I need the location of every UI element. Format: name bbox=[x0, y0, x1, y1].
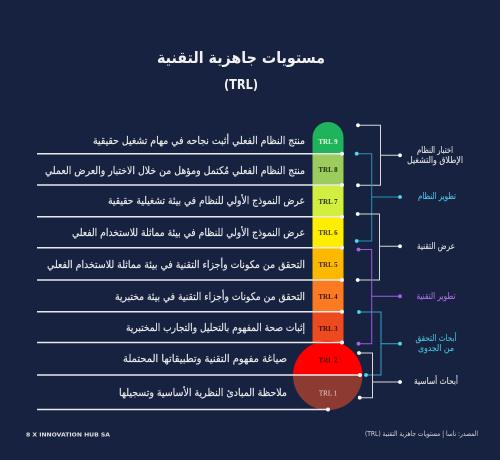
thermometer bbox=[293, 122, 362, 410]
bracket: basic research bbox=[357, 351, 402, 400]
bracket: technology development bbox=[357, 248, 402, 346]
segment: TRL 5 bbox=[312, 248, 344, 280]
level descriptions: منتج النظام الفعلي أثبت نجاحه في مهام تشغيل حقيقية bbox=[93, 133, 305, 147]
segment: TRL 7 bbox=[312, 185, 344, 217]
bulb: TRL 1 bbox=[293, 376, 362, 410]
TRL labels: TRL 6 bbox=[318, 229, 338, 237]
category label: feasibility research bbox=[416, 332, 456, 354]
segment: TRL 9 bbox=[312, 122, 344, 154]
title: مستويات جاهزية التقنية bbox=[157, 48, 325, 67]
category label: basic research: أبحاث أساسية bbox=[414, 375, 458, 387]
TRL labels: TRL 9 bbox=[318, 138, 338, 146]
source note: المصدر: ناسا | مستويات جاهزية التقنية (TRL) bbox=[365, 430, 478, 438]
segment: TRL 3 bbox=[312, 312, 344, 343]
level descriptions: ملاحظة المبادئ النظرية الأساسية وتسجيلها bbox=[119, 386, 287, 399]
segment: TRL 8 bbox=[312, 154, 344, 185]
title: (TRL) bbox=[224, 78, 258, 93]
brand logo text: 8 X INNOVATION HUB SA bbox=[26, 432, 110, 438]
TRL labels: TRL 2 bbox=[318, 356, 338, 364]
TRL labels bbox=[318, 138, 338, 398]
category label: technology development: تطوير التقنية bbox=[416, 292, 456, 302]
level descriptions: صياغة مفهوم التقنية وتطبيقاتها المحتملة bbox=[123, 353, 287, 365]
bracket: feasibility research bbox=[357, 310, 402, 377]
level descriptions: إثبات صحة المفهوم بالتحليل والتجارب المختبرية bbox=[126, 322, 305, 334]
level descriptions: عرض النموذج الأولي للنظام في بيئة مماثلة للاستخدام الفعلي bbox=[72, 226, 305, 239]
level descriptions: التحقق من مكونات وأجزاء التقنية في بيئة مختبرية bbox=[115, 289, 305, 303]
level descriptions bbox=[45, 133, 305, 399]
category label: system test: اختبار النظام bbox=[417, 146, 453, 156]
TRL labels: TRL 5 bbox=[318, 261, 338, 269]
segment: TRL 6 bbox=[312, 217, 344, 248]
level descriptions: عرض النموذج الأولي للنظام في بيئة تشغيلية حقيقية bbox=[108, 194, 305, 207]
category label: system development: تطوير النظام bbox=[418, 192, 456, 202]
bracket: system test bbox=[356, 123, 402, 187]
category label: technology demonstration: عرض التقنية bbox=[417, 242, 455, 252]
TRL labels: TRL 4 bbox=[318, 293, 338, 301]
TRL labels: TRL 1 bbox=[319, 390, 338, 398]
TRL labels: TRL 8 bbox=[318, 166, 338, 174]
bracket: technology demonstration bbox=[356, 212, 402, 282]
TRL labels: TRL 3 bbox=[318, 325, 338, 333]
category label: feasibility research: من الجدوى bbox=[418, 344, 454, 354]
level divider lines bbox=[37, 152, 362, 411]
level descriptions: التحقق من مكونات وأجزاء التقنية في بيئة مماثلة للاستخدام الفعلي bbox=[47, 257, 305, 271]
level descriptions: منتج النظام الفعلي مُكتمل ومؤهل من خلال الاختبار والعرض العملي bbox=[45, 165, 305, 177]
title bbox=[157, 48, 325, 93]
category label: feasibility research: أبحاث التحقق bbox=[416, 332, 456, 344]
category label: system test bbox=[407, 146, 463, 166]
category label: system test: الإطلاق والتشغيل bbox=[407, 156, 463, 166]
TRL labels: TRL 7 bbox=[318, 198, 338, 206]
bracket: system development bbox=[355, 152, 402, 243]
bulb: TRL 2 bbox=[293, 341, 362, 376]
segment: TRL 4 bbox=[312, 280, 344, 312]
